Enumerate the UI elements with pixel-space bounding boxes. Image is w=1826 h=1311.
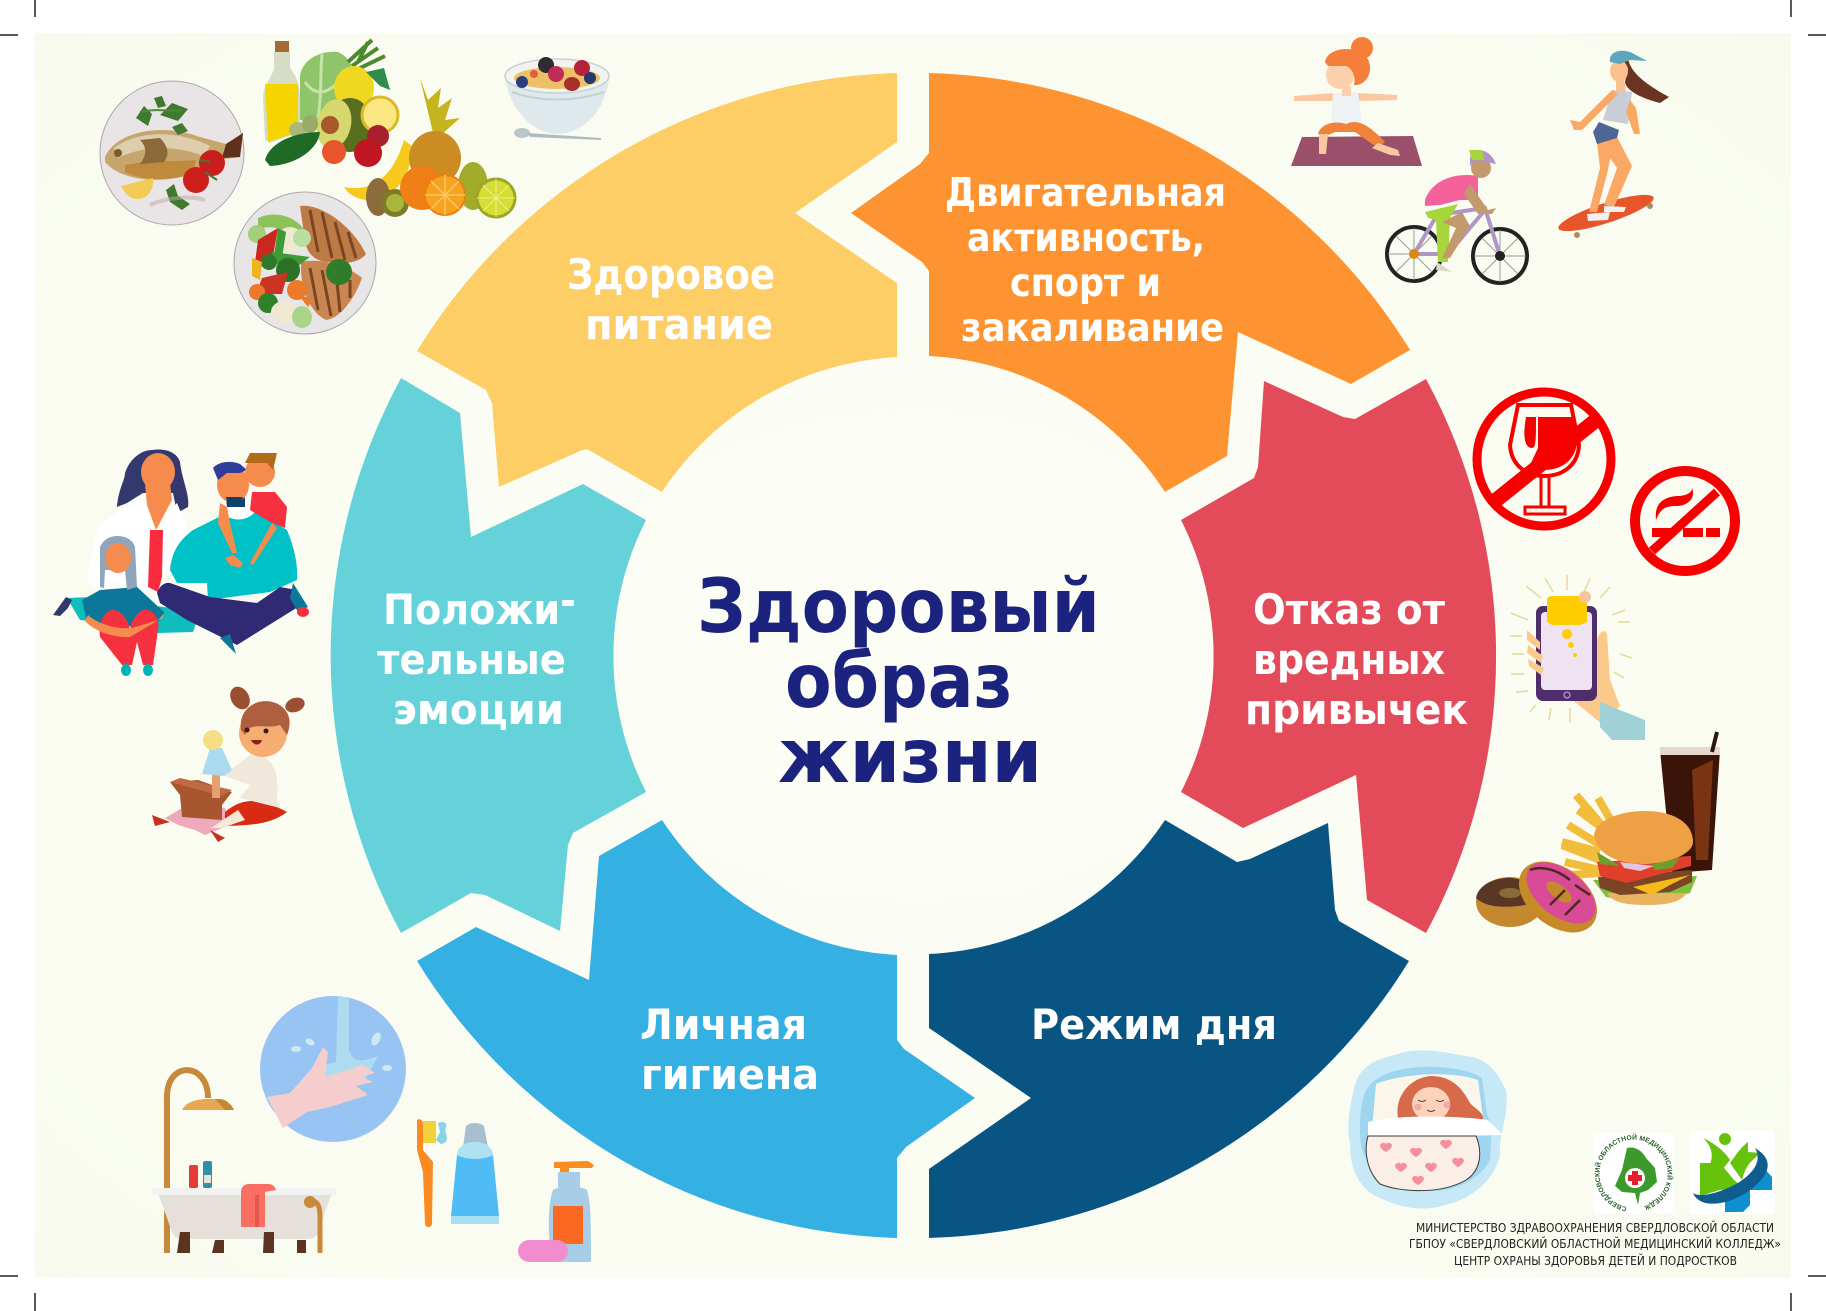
girl's trousers	[100, 610, 158, 665]
label: giving up bad habits: Отказ от	[1253, 585, 1446, 634]
label: giving up bad habits	[1245, 585, 1468, 734]
label: personal hygiene: Личная	[640, 1000, 807, 1049]
icon: cyclist	[1387, 150, 1527, 283]
title: Здоровый	[697, 562, 1100, 650]
title	[697, 562, 1100, 800]
dad's trousers	[157, 583, 298, 645]
label: personal hygiene: гигиена	[641, 1050, 819, 1099]
title: жизни	[778, 712, 1042, 800]
boy	[250, 492, 287, 528]
label: healthy eating	[567, 250, 775, 349]
icon: grilled meat plate	[234, 192, 376, 334]
footer text: МИНИСТЕРСТВО ЗДРАВООХРАНЕНИЯ СВЕРДЛОВСКОЙ ОБЛАСТИ	[1416, 1220, 1774, 1235]
label: giving up bad habits: вредных	[1253, 635, 1445, 684]
label: physical activity: Двигательная	[945, 171, 1226, 216]
label: positive emotions: -	[560, 576, 576, 625]
footer text	[1409, 1220, 1781, 1268]
icon: girl with doll	[152, 683, 307, 842]
logo: health center	[1690, 1131, 1775, 1214]
icon: oil bottle and vegetables	[263, 40, 398, 167]
label: healthy eating: Здоровое	[567, 250, 775, 299]
icon: fast food	[1476, 732, 1720, 947]
icon: washing hands	[260, 996, 406, 1142]
logo: medical college: СВЕРДЛОВСКИЙ ОБЛАСТНОЙ МЕДИЦИНСКИЙ КОЛЛЕДЖ	[1594, 1134, 1674, 1212]
icon: fish plate	[100, 81, 244, 225]
woman's shirt	[87, 497, 188, 593]
label: personal hygiene	[640, 1000, 819, 1099]
segment: giving up bad habits	[1181, 379, 1496, 933]
label: daily routine: Режим дня	[1031, 1000, 1277, 1049]
label: physical activity: закаливание	[961, 306, 1224, 351]
segment: healthy eating	[417, 73, 897, 492]
label: giving up bad habits: привычек	[1245, 685, 1468, 734]
segment: positive emotions	[331, 378, 646, 933]
label: positive emotions: Положи	[383, 585, 578, 634]
label: physical activity: активность,	[967, 216, 1205, 261]
segment: daily routine	[929, 820, 1409, 1238]
icon: no alcohol	[1477, 392, 1611, 526]
label: physical activity	[945, 171, 1226, 351]
woman's hair	[117, 450, 188, 513]
segment: physical activity	[851, 73, 1410, 492]
icon: family	[53, 450, 309, 676]
icon: no smoking	[1635, 471, 1735, 571]
label: physical activity: спорт и	[1010, 261, 1161, 306]
label: positive emotions: тельные	[377, 635, 566, 684]
title: образ	[785, 637, 1013, 725]
girl's hair	[100, 536, 137, 590]
icon: yoga girl	[1291, 37, 1422, 166]
icon: cereal bowl	[505, 57, 609, 140]
icon: sleeping girl	[1348, 1050, 1507, 1209]
footer text: ЦЕНТР ОХРАНЫ ЗДОРОВЬЯ ДЕТЕЙ И ПОДРОСТКОВ	[1454, 1253, 1737, 1268]
dad's sweater	[170, 510, 297, 600]
icon: toothbrush	[417, 1119, 447, 1227]
woman's legs	[67, 597, 200, 633]
label: healthy eating: питание	[585, 300, 773, 349]
label: positive emotions	[377, 576, 576, 734]
label: positive emotions: эмоции	[393, 685, 564, 734]
icon: fruit pile	[344, 78, 515, 217]
icon: hand holding phone	[1510, 575, 1645, 740]
segment: personal hygiene	[417, 820, 975, 1238]
icon: skateboarder	[1555, 51, 1669, 238]
dad's head	[225, 490, 245, 507]
icon: toothpaste tube	[451, 1123, 499, 1224]
girl's sweater	[82, 587, 165, 628]
icon: bath and shower	[152, 1070, 337, 1253]
icon: soap and pump bottle	[518, 1161, 594, 1262]
